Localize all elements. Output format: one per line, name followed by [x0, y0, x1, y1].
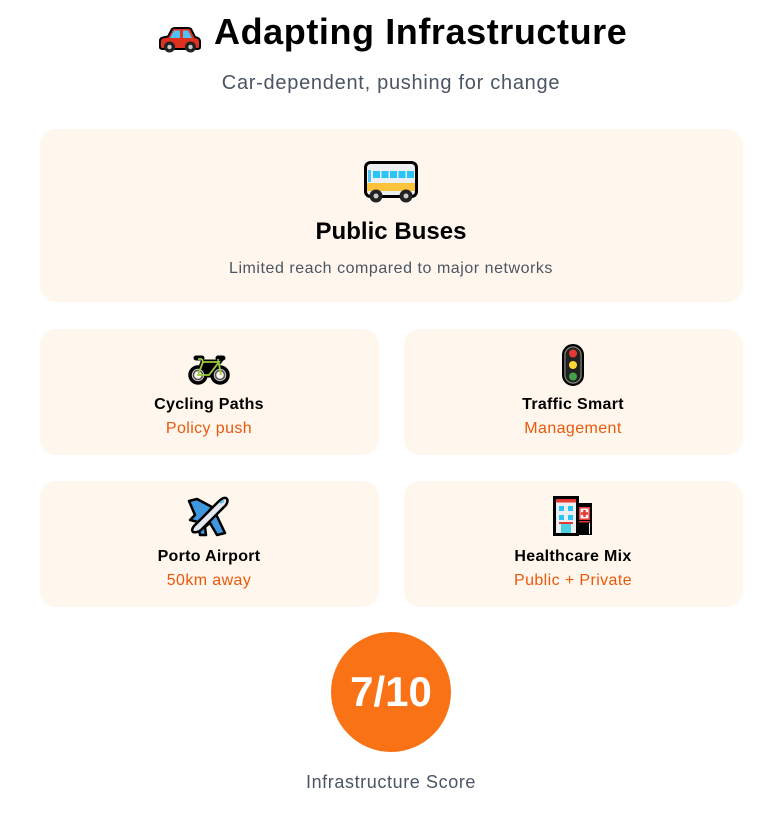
value: Public + Private	[514, 572, 632, 589]
heading: Public Buses	[315, 218, 467, 245]
icon: traffic light	[562, 344, 584, 386]
icon: hospital	[553, 496, 592, 536]
icon: bicycle	[188, 356, 230, 385]
title: Adapting Infrastructure	[214, 11, 627, 52]
panel: cycling paths	[40, 329, 379, 455]
score circle	[331, 632, 451, 752]
subtitle: Car-dependent, pushing for change	[222, 72, 560, 94]
label: Porto Airport	[158, 548, 260, 565]
panel: public buses	[40, 129, 743, 302]
score circle: 7/10	[350, 668, 432, 715]
value: Management	[524, 420, 622, 437]
description: Limited reach compared to major networks	[229, 260, 553, 277]
panel: traffic smart	[404, 329, 743, 455]
value: 50km away	[167, 572, 251, 589]
value: Policy push	[166, 420, 252, 437]
icon: car	[159, 27, 201, 52]
label: Traffic Smart	[522, 396, 624, 413]
panel: healthcare mix	[404, 481, 743, 607]
icon: bus	[364, 161, 418, 202]
icon: airplane	[188, 496, 229, 536]
label: Healthcare Mix	[514, 548, 632, 565]
panel: porto airport	[40, 481, 379, 607]
label: Cycling Paths	[154, 396, 264, 413]
score label: Infrastructure Score	[306, 772, 476, 792]
